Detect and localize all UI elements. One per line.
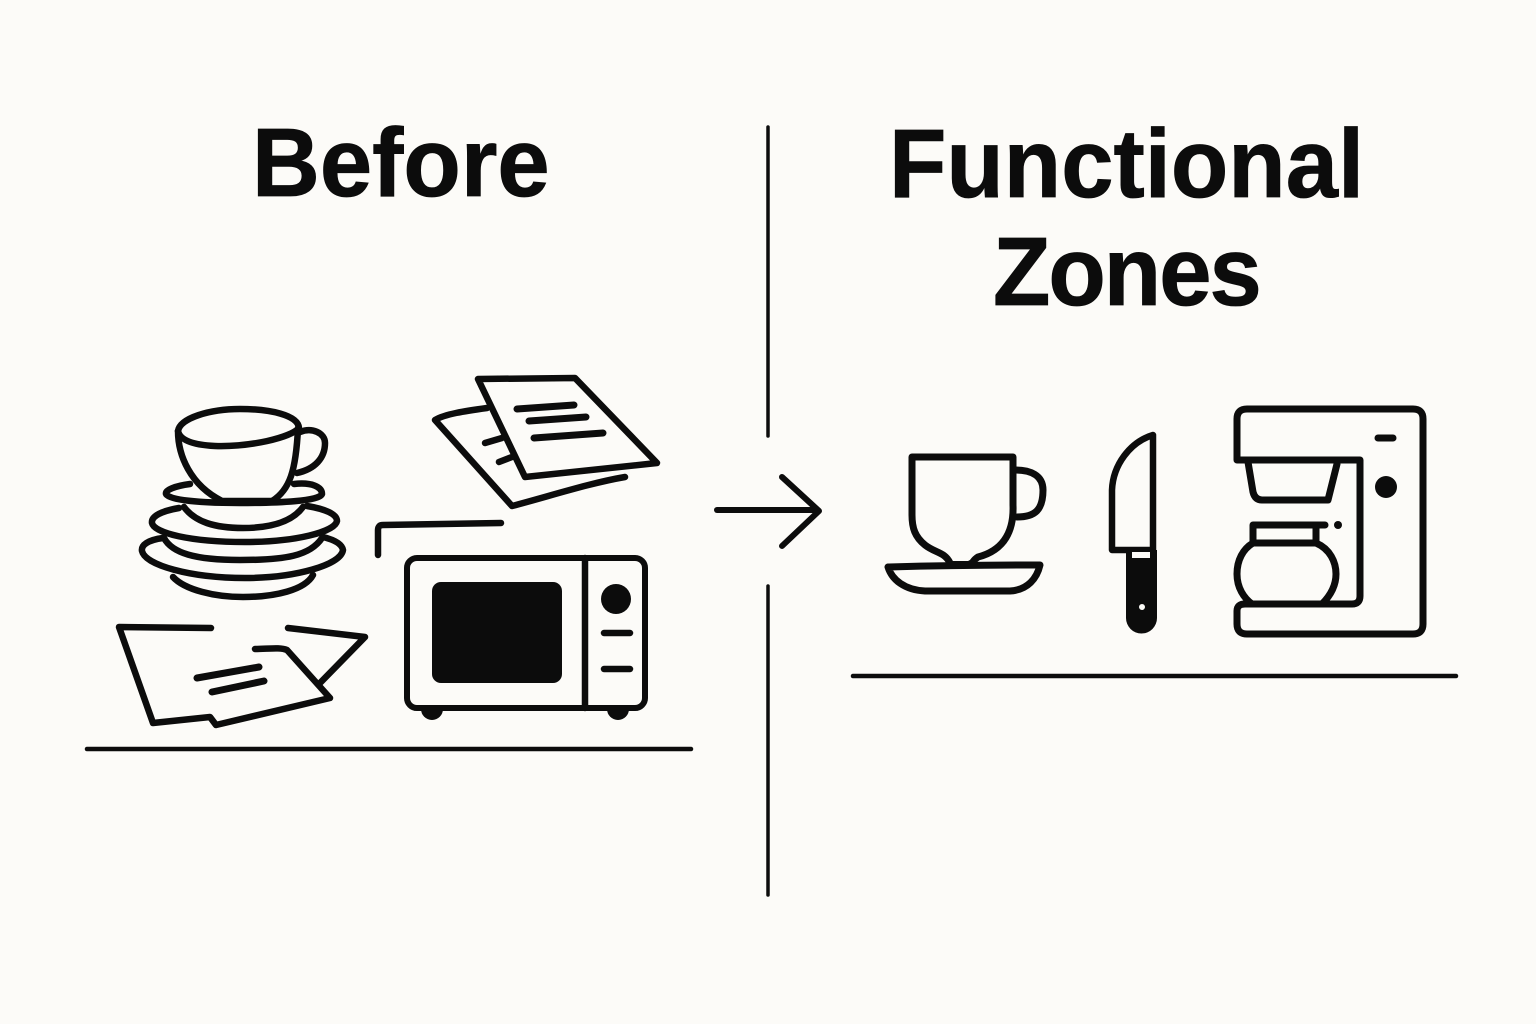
baseline: before shelf bbox=[87, 747, 691, 751]
cup handle bbox=[297, 430, 325, 473]
cup body bbox=[178, 428, 298, 501]
saucer bbox=[166, 484, 322, 503]
screen bbox=[432, 582, 562, 683]
heading: Before: Before bbox=[252, 108, 550, 217]
body bbox=[1237, 409, 1423, 634]
cup rim bbox=[178, 409, 299, 446]
icon: papers top bbox=[435, 378, 657, 506]
filter basket bbox=[1248, 462, 1337, 500]
heading: Functional Zones: Zones bbox=[993, 217, 1260, 326]
display bbox=[1378, 434, 1393, 442]
feet bbox=[421, 698, 443, 720]
heading: Functional Zones: Functional bbox=[889, 109, 1364, 218]
lower plate bbox=[142, 537, 343, 578]
heading: Functional Zones bbox=[889, 109, 1364, 326]
baseline: functional shelf bbox=[853, 674, 1456, 678]
icon: coffee maker bbox=[1237, 409, 1423, 634]
icon: knife bbox=[1112, 435, 1157, 634]
carafe bbox=[1253, 525, 1325, 543]
bracket stroke above microwave bbox=[378, 523, 501, 555]
middle plate bbox=[152, 506, 337, 542]
icon: cup and saucer bbox=[888, 457, 1043, 591]
vertical divider with gap for arrow bbox=[766, 127, 770, 895]
knob bbox=[601, 584, 631, 614]
icon: microwave bbox=[407, 558, 645, 720]
arrow: before to after bbox=[717, 477, 819, 546]
icon: scattered paper bottom-left bbox=[119, 627, 365, 725]
icon: stack of cup and plates bbox=[142, 409, 343, 597]
